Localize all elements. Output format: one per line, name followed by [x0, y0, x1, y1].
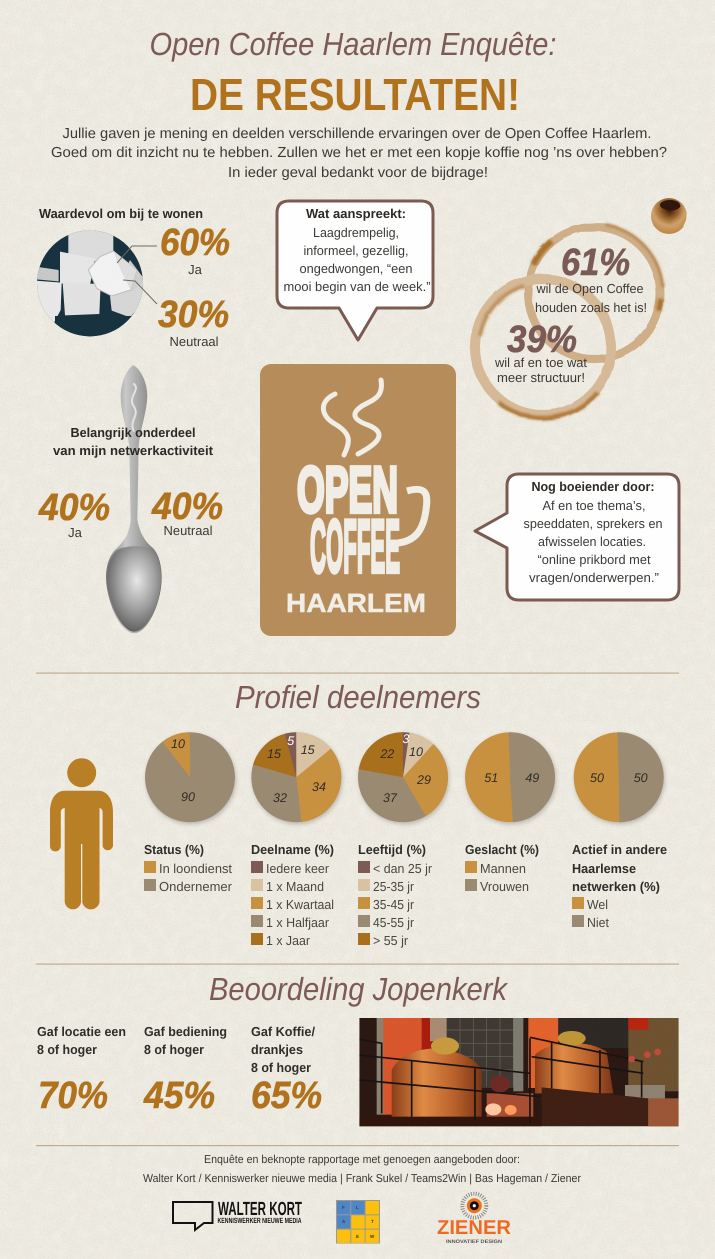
pie labels: deelname: 5	[287, 734, 294, 748]
panel: netwerkactiviteit	[38, 365, 223, 633]
callout: nog boeiender door: Nog boeiender door:	[532, 479, 654, 494]
pie labels: geslacht	[484, 771, 539, 785]
label: structuur: meer structuur!	[497, 370, 585, 385]
footer credits: Enquête en beknopte rapportage met genoegen aangeboden door:	[204, 1154, 520, 1166]
label: houden: wil de Open Coffee	[536, 281, 644, 296]
logo: walter kort: KENNISWERKER NIEUWE MEDIA	[218, 1216, 302, 1225]
callout: wat aanspreekt: mooi begin van de week.”	[284, 279, 430, 294]
pie chart: geslacht	[465, 732, 555, 822]
rating: koffie en drankjes: Gaf Koffie/	[251, 1024, 315, 1039]
pie labels: geslacht: 49	[525, 771, 539, 785]
callout: wat aanspreekt: Wat aanspreekt:	[306, 206, 406, 221]
label: ja: Ja	[68, 525, 83, 540]
legend: deelname: 1 x Kwartaal	[266, 897, 334, 912]
footer credits	[143, 1154, 581, 1185]
legend: leeftijd	[358, 842, 433, 948]
panel: coffee rings	[443, 198, 687, 447]
pie chart: leeftijd	[358, 732, 448, 822]
pie labels: status: 10	[171, 737, 185, 751]
icon: person	[50, 758, 113, 909]
legend: leeftijd: 25-35 jr	[373, 879, 415, 894]
coffee stain	[651, 198, 687, 234]
pie labels: leeftijd	[379, 732, 431, 805]
legend: leeftijd: 35-45 jr	[373, 897, 415, 912]
pie labels: leeftijd: 22	[379, 747, 394, 761]
legend: deelname: 1 x Maand	[266, 879, 324, 894]
legend: geslacht: Mannen	[480, 861, 526, 876]
rating: bediening: 8 of hoger	[144, 1042, 204, 1057]
label: houden	[535, 281, 647, 315]
intro text: Goed om dit inzicht nu te hebben. Zullen we het er met een kopje koffie nog ’ns over hebben?	[51, 145, 667, 161]
legend: deelname: 1 x Halfjaar	[266, 915, 330, 930]
legend: deelname	[251, 842, 334, 948]
rating: bediening: Gaf bediening	[144, 1024, 227, 1039]
label: structuur: wil af en toe wat	[494, 355, 587, 370]
callout: nog boeiender door: Af en toe thema’s,	[542, 498, 646, 513]
legend: status	[144, 842, 233, 894]
logo: ziener: INNOVATIEF DESIGN	[446, 1239, 502, 1245]
pie labels: leeftijd: 37	[383, 791, 398, 805]
legend: geslacht: Vrouwen	[480, 879, 529, 894]
label: neutraal: Neutraal	[170, 334, 219, 349]
label: neutraal: Neutraal	[164, 523, 213, 538]
rating: locatie: 8 of hoger	[37, 1042, 97, 1057]
label: ja: Ja	[188, 262, 203, 277]
label: houden: houden zoals het is!	[535, 300, 647, 315]
footer credits: Walter Kort / Kenniswerker nieuwe media | Frank Sukel / Teams2Win | Bas Hageman / Ziener	[143, 1173, 581, 1185]
ring: upper	[505, 204, 683, 382]
intro text: Jullie gaven je mening en deelden verschillende ervaringen over de Open Coffee Haarlem.	[62, 126, 652, 142]
pie labels: actief in netwerken	[590, 771, 648, 785]
pie labels: deelname	[267, 734, 326, 805]
heading: Waardevol om bij te wonen	[39, 206, 203, 221]
rating: bediening: 45%	[143, 1075, 215, 1117]
logo: ziener	[437, 1194, 512, 1245]
pie labels: deelname: 32	[273, 791, 287, 805]
legend: status: Ondernemer	[159, 879, 233, 894]
intro text: In ieder geval bedankt voor de bijdrage!	[228, 165, 488, 181]
logo: teams2win grid: E	[356, 1234, 359, 1239]
title: Open Coffee Haarlem Enquête:	[150, 26, 556, 62]
panel: waardevol om bij te wonen	[35, 206, 230, 349]
rating: koffie en drankjes: 65%	[251, 1075, 322, 1117]
stat: 40% neutraal: 40%	[151, 486, 223, 528]
pie labels: status	[171, 737, 195, 804]
legend: status: In loondienst	[159, 861, 232, 876]
pie labels: status: 90	[181, 790, 195, 804]
stat: 61%: 61%	[561, 242, 630, 284]
wordmark: coffee: COFFEE	[310, 508, 400, 591]
rating: koffie en drankjes: 8 of hoger	[251, 1060, 311, 1075]
callout: wat aanspreekt: ongedwongen, “een	[300, 261, 412, 276]
legend: actief in netwerken: Wel	[587, 897, 608, 912]
callout: nog boeiender door: “online prikbord met	[538, 552, 651, 567]
pie labels: actief in netwerken: 50	[634, 771, 648, 785]
logo: ziener: ZIENER	[437, 1217, 512, 1239]
stat: 40% ja: 40%	[38, 487, 110, 529]
rating: bediening	[143, 1024, 227, 1117]
legend: actief in netwerken	[572, 842, 667, 930]
logo: teams2win grid: W	[370, 1234, 375, 1239]
heading: profiel deelnemers: Profiel deelnemers	[235, 679, 481, 715]
legend: leeftijd: 45-55 jr	[373, 915, 415, 930]
legend: geslacht	[465, 842, 539, 894]
heading: van mijn netwerkactiviteit	[53, 443, 214, 458]
intro text	[51, 126, 667, 181]
rating: koffie en drankjes: drankjes	[251, 1042, 303, 1057]
callout: wat aanspreekt	[277, 201, 433, 340]
callout: nog boeiender door: speeddaten, sprekers en	[524, 516, 662, 531]
stat: 60%: 60%	[160, 222, 230, 264]
rating: koffie en drankjes	[251, 1024, 322, 1117]
logo: teams2win grid: L	[356, 1205, 359, 1210]
callout: nog boeiender door: afwisselen locaties.	[538, 534, 646, 549]
legend: actief in netwerken: netwerken (%)	[572, 879, 660, 894]
legend: leeftijd: > 55 jr	[373, 933, 409, 948]
wordmark: open: OPEN	[297, 457, 398, 528]
heading	[53, 425, 214, 458]
callout: wat aanspreekt: Laagdrempelig,	[313, 225, 399, 240]
logo: teams2win grid: A	[342, 1219, 346, 1224]
pie labels: deelname: 34	[312, 780, 326, 794]
label: structuur	[494, 355, 587, 385]
legend: deelname: Iedere keer	[266, 861, 330, 876]
legend: actief in netwerken: Haarlemse	[572, 861, 636, 876]
photo: sugar cubes	[35, 229, 147, 339]
pie labels: geslacht: 51	[484, 771, 498, 785]
heading: de resultaten: DE RESULTATEN!	[190, 69, 520, 120]
rating: locatie	[37, 1024, 126, 1117]
logo: teams2win grid: T	[371, 1219, 374, 1224]
callout: nog boeiender door	[475, 474, 679, 600]
rating: locatie: 70%	[38, 1075, 108, 1117]
legend: deelname: Deelname (%)	[251, 842, 334, 857]
icon: steam	[323, 380, 381, 455]
stat: 39%: 39%	[507, 319, 577, 361]
heading: beoordeling jopenkerk: Beoordeling Jopenkerk	[209, 971, 509, 1007]
legend: leeftijd: Leeftijd (%)	[358, 842, 426, 857]
callout: nog boeiender door: vragen/onderwerpen.”	[529, 570, 659, 585]
legend: actief in netwerken: Niet	[587, 915, 609, 930]
pie chart: status	[145, 732, 235, 822]
pie chart: deelname	[251, 732, 341, 822]
legend: geslacht: Geslacht (%)	[465, 842, 539, 857]
logo: walter kort: WALTER KORT	[218, 1199, 302, 1220]
leader lines	[117, 246, 157, 304]
logo: teams2win grid	[336, 1200, 380, 1244]
logo: teams2win grid: F	[342, 1205, 345, 1210]
legend: leeftijd: < dan 25 jr	[373, 861, 433, 876]
pie labels: deelname: 15	[267, 747, 281, 761]
callout: wat aanspreekt: informeel, gezellig,	[304, 243, 408, 258]
pie labels: leeftijd: 10	[409, 745, 423, 759]
legend: status: Status (%)	[144, 842, 204, 857]
legend: deelname: 1 x Jaar	[266, 933, 311, 948]
wordmark: haarlem: HAARLEM	[286, 588, 426, 618]
spoon	[106, 365, 162, 633]
legend: actief in netwerken: Actief in andere	[572, 842, 667, 857]
pie labels: leeftijd: 29	[416, 773, 431, 787]
logo card: open coffee haarlem	[260, 364, 456, 636]
heading: Belangrijk onderdeel	[70, 425, 196, 440]
pie chart: actief in netwerken	[574, 732, 664, 822]
ring: lower	[443, 247, 643, 447]
pie labels: actief in netwerken: 50	[590, 771, 604, 785]
pie labels: deelname: 15	[301, 743, 315, 757]
pie labels: leeftijd: 3	[403, 732, 410, 746]
icon: cup handle	[398, 489, 427, 543]
stat: 30%: 30%	[158, 294, 229, 336]
photo: brewery	[359, 1018, 679, 1127]
logo: walter kort	[173, 1199, 302, 1230]
rating: locatie: Gaf locatie een	[37, 1024, 126, 1039]
